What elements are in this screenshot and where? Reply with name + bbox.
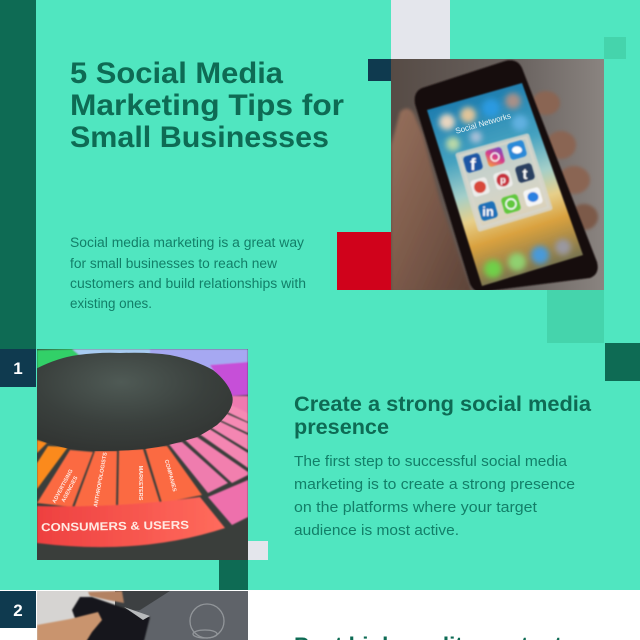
- step 2 number badge: 2: [13, 601, 23, 620]
- step 1 number badge: 1: [13, 359, 23, 378]
- phone glare: [124, 607, 150, 620]
- step 2 number badge: [0, 591, 36, 628]
- intro text: [70, 235, 306, 311]
- shirt: [37, 591, 122, 640]
- decorative square: large green: [547, 290, 604, 343]
- intro text: customers and build relationships with: [70, 276, 306, 291]
- central dark disc: [30, 353, 233, 451]
- photo: hands holding phone over table: [37, 591, 248, 640]
- blurred home icons: [439, 93, 571, 278]
- phone body: [415, 60, 598, 292]
- step 1 body text: The first step to successful social media: [294, 454, 568, 470]
- decorative square: small green: [604, 37, 626, 59]
- social app icons: p: [500, 175, 506, 185]
- app folder: [458, 136, 550, 229]
- dark background: [115, 591, 170, 612]
- title: Small Businesses: [70, 121, 329, 154]
- wheel labels: CONSUMERS & USERS: [41, 520, 189, 534]
- decorative square: navy: [368, 59, 391, 81]
- wheel labels: MARKETERS: [137, 466, 143, 501]
- step 1 body text: audience is most active.: [294, 523, 459, 539]
- social app icons: in: [482, 204, 494, 219]
- title: [70, 57, 344, 154]
- fingers: [88, 591, 124, 603]
- social app icons: t: [522, 166, 528, 183]
- title: Marketing Tips for: [70, 89, 344, 122]
- intro text: existing ones.: [70, 296, 152, 311]
- step 1 heading: presence: [294, 416, 389, 439]
- wheel labels: AGENCIES: [61, 475, 80, 504]
- step 1 body text: marketing is to create a strong presence: [294, 477, 575, 493]
- dark green left bar: [0, 0, 36, 349]
- glass: [190, 604, 224, 638]
- title: 5 Social Media: [70, 57, 283, 90]
- photo: colour wheel chart: [30, 349, 248, 560]
- intro text: Social media marketing is a great way: [70, 235, 304, 250]
- step 1 body text: on the platforms where your target: [294, 500, 537, 516]
- step 1 heading: Create a strong social media: [294, 393, 591, 416]
- wheel labels: COMPANIES: [163, 459, 177, 493]
- phone: [72, 597, 150, 640]
- social app icons: [462, 139, 544, 222]
- step 1 heading: [294, 393, 591, 439]
- phone screen: [427, 83, 583, 286]
- social app icons: f: [470, 155, 476, 174]
- screen label: Social Networks: [454, 111, 512, 136]
- photo: hand holding phone with social apps: [391, 59, 604, 292]
- decorative square: red: [337, 232, 391, 290]
- white lower section: [0, 590, 640, 640]
- small grey square: [248, 541, 268, 560]
- step 1 number badge: [0, 349, 36, 387]
- intro text: for small businesses to reach new: [70, 256, 277, 271]
- wheel labels: ANTHROPOLOGISTS: [93, 452, 109, 508]
- decorative square: dark green: [605, 343, 640, 381]
- table with glass: [139, 591, 248, 640]
- step 1 body text: [294, 454, 575, 539]
- wheel labels: [41, 452, 189, 534]
- wheel segments: [37, 349, 248, 547]
- hand and fingers: [391, 91, 598, 292]
- small dark green square: [219, 560, 248, 590]
- wheel labels: ADVERTISING: [52, 469, 75, 505]
- hand: [37, 612, 102, 640]
- decorative square: light grey: [391, 0, 450, 59]
